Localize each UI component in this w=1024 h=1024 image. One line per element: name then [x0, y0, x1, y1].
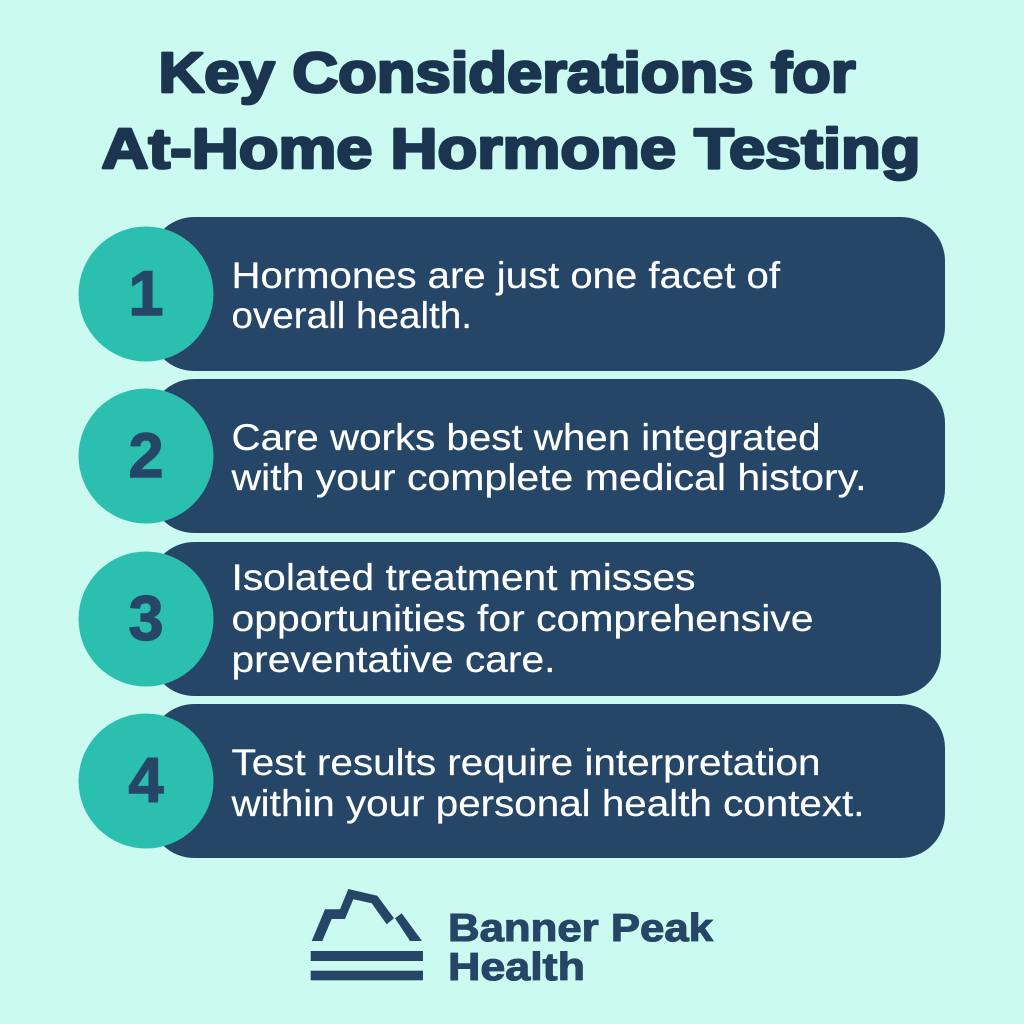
logo wordmark: [448, 907, 713, 989]
title: Key Considerations for: [158, 41, 856, 105]
item 1 number badge: 1: [128, 259, 164, 329]
icon: mountain with horizon lines: [311, 889, 423, 980]
title: At-Home Hormone Testing: [102, 117, 920, 181]
item 4 bar: [150, 704, 945, 858]
panel: item 4: [78, 704, 945, 858]
item 2 number badge: 2: [128, 421, 164, 491]
item 4 text: Test results require interpretation: [232, 741, 820, 783]
item 1 text: overall health.: [232, 294, 472, 336]
item 3 bar: [150, 542, 941, 696]
logo: Banner Peak Health: [311, 889, 713, 989]
item 2 text: with your complete medical history.: [230, 456, 867, 498]
item 2 bar: [150, 379, 945, 533]
panel: item 1: [78, 217, 945, 371]
item 1 text: Hormones are just one facet of: [232, 254, 781, 296]
panel: item 3: [78, 542, 941, 696]
title: [102, 41, 920, 181]
item 4 number badge: [78, 714, 214, 848]
item 1 number badge: [78, 226, 214, 362]
item 3 number badge: 3: [128, 584, 164, 654]
panel: item 2: [78, 379, 945, 533]
item 2 text: Care works best when integrated: [232, 416, 820, 458]
item 3 number badge: [78, 552, 214, 686]
logo wordmark: Health: [448, 946, 585, 989]
item 1 bar: [150, 217, 945, 371]
item 1 text: [232, 254, 781, 336]
item 3 text: opportunities for comprehensive: [232, 597, 814, 639]
item 4 text: [230, 741, 864, 824]
item 3 text: preventative care.: [232, 638, 556, 680]
item 3 text: Isolated treatment misses: [232, 556, 696, 598]
item 4 text: within your personal health context.: [230, 782, 864, 824]
item 4 number badge: 4: [128, 746, 164, 816]
item 2 number badge: [78, 388, 214, 524]
item 2 text: [230, 416, 867, 498]
item 3 text: [232, 556, 814, 680]
logo wordmark: Banner Peak: [448, 907, 713, 950]
